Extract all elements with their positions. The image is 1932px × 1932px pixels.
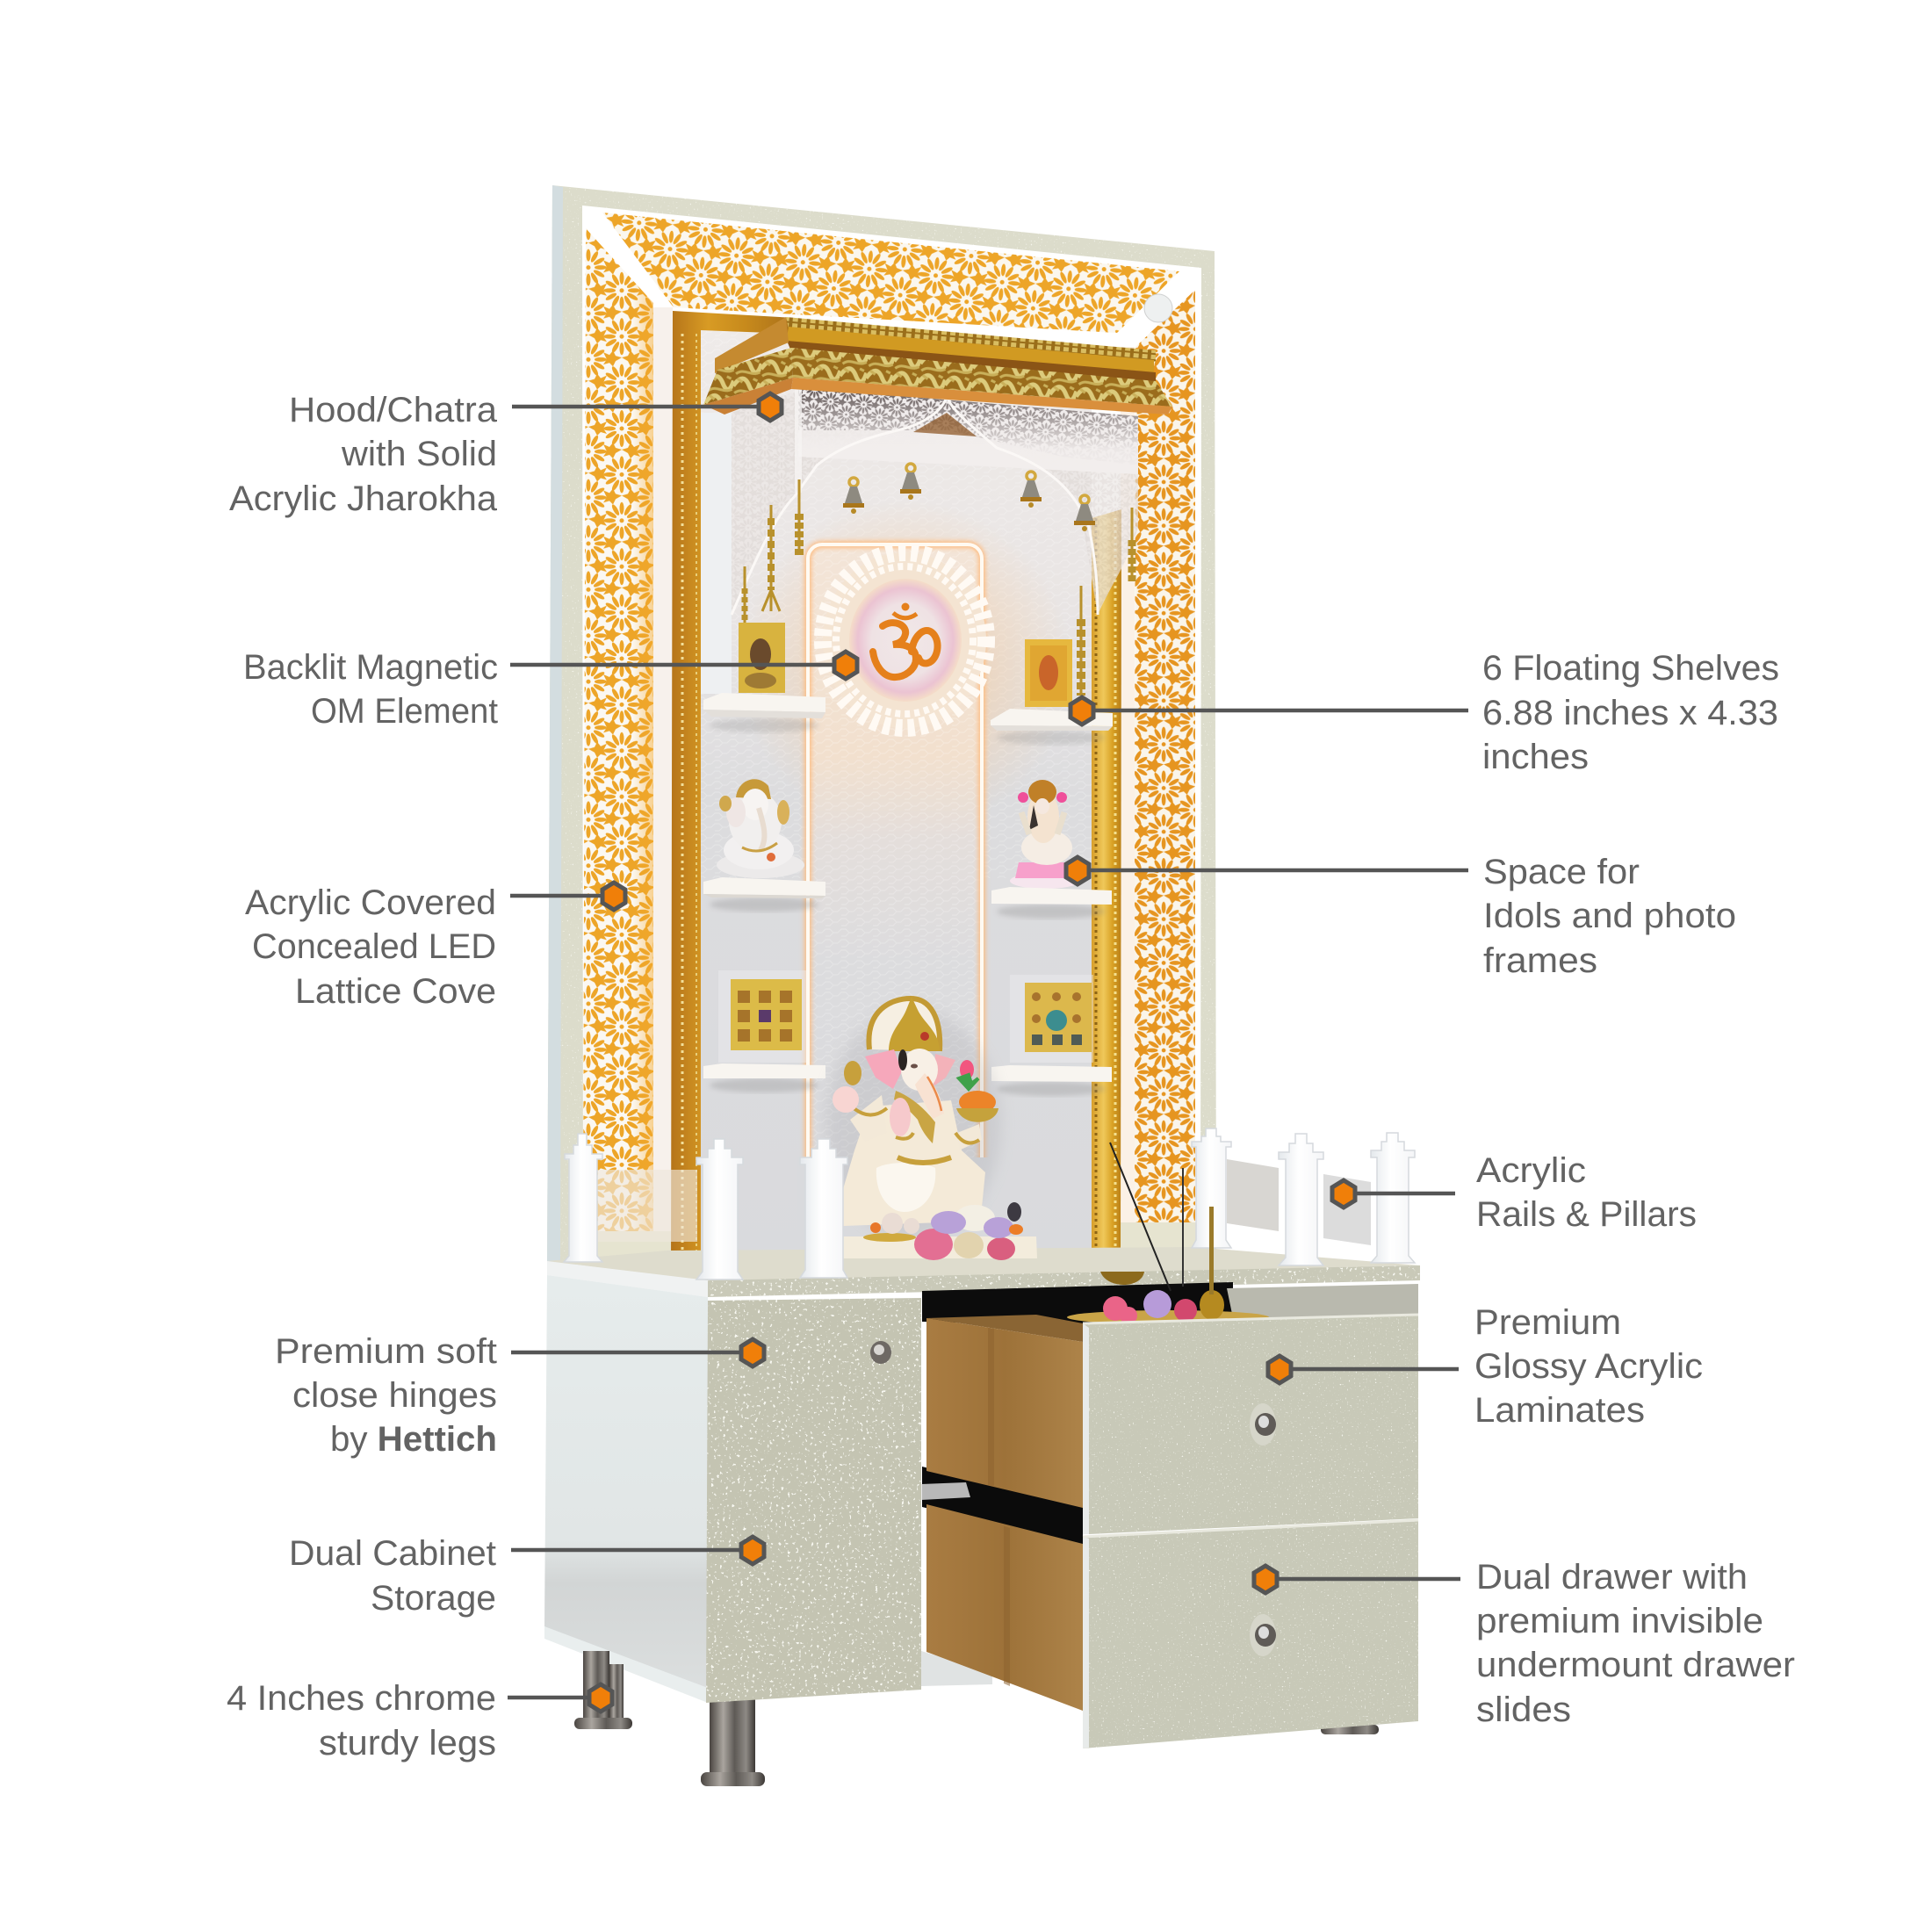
icon: lower drawer knob — [1250, 1614, 1276, 1656]
callout: floating shelves: 6 Floating Shelves — [1482, 649, 1779, 688]
small ganesha idol — [717, 779, 804, 878]
callout: cabinet storage: Storage — [371, 1579, 496, 1618]
lakshmi idol — [1010, 780, 1080, 889]
icon: OM backlit mandala — [823, 552, 986, 728]
callout: laminates: Glossy Acrylic — [1474, 1347, 1703, 1386]
flowers at idol base — [914, 1202, 1023, 1260]
callout: rails and pillars — [1332, 1151, 1697, 1234]
callout: laminates: Laminates — [1474, 1391, 1645, 1430]
callout: floating shelves — [1071, 649, 1779, 776]
panel: upper drawer front — [1083, 1315, 1418, 1534]
callout: dual drawer: slides — [1476, 1690, 1571, 1729]
floating shelves — [703, 693, 1113, 1096]
callout: hinges — [275, 1332, 764, 1459]
panel: gold moulding frame — [671, 311, 1121, 1276]
panel: interior black gaps — [921, 1282, 1233, 1686]
callout: cabinet storage: Dual Cabinet — [289, 1534, 496, 1573]
callout: floating shelves: 6.88 inches x 4.33 — [1482, 694, 1778, 732]
pooja items — [1067, 1143, 1269, 1324]
callout: rails and pillars: Acrylic — [1476, 1151, 1586, 1190]
callout: laminates — [1268, 1303, 1703, 1430]
icon: brand seal — [1144, 294, 1172, 322]
callout: dual drawer: Dual drawer with — [1476, 1558, 1748, 1597]
callout: laminates: Premium — [1474, 1303, 1621, 1342]
callout: floating shelves: inches — [1482, 738, 1589, 776]
icon: hanging bells — [843, 464, 1095, 531]
translucent rail right — [1227, 1159, 1371, 1245]
back right top panel — [1227, 1284, 1418, 1318]
icon: gold card right — [1025, 639, 1072, 707]
callout: LED cove: Acrylic Covered — [245, 883, 496, 922]
icon: yantra right — [1010, 975, 1093, 1063]
panel: lower drawer wood side — [926, 1504, 1083, 1711]
legs — [574, 1651, 1379, 1786]
callout: cabinet storage — [289, 1534, 764, 1618]
icon: door knob — [870, 1341, 891, 1364]
panel: lattice left band — [583, 228, 673, 1238]
panel: outer back frame — [547, 185, 1216, 1265]
panel: lower cream strips — [583, 1222, 1200, 1260]
callout: legs: 4 Inches chrome — [227, 1679, 496, 1718]
panel: countertop — [547, 1247, 1420, 1297]
acrylic pillars — [564, 1128, 1415, 1280]
callout: dual drawer: undermount drawer — [1476, 1646, 1795, 1684]
callout: rails and pillars: Rails & Pillars — [1476, 1195, 1697, 1234]
panel: cabinet white side — [544, 1275, 708, 1703]
callout: idols space: frames — [1483, 941, 1597, 980]
callout: idols space: Space for — [1483, 853, 1640, 891]
callout: OM element: OM Element — [311, 692, 498, 731]
panel: back wall — [701, 325, 1092, 1275]
callout: hood: with Solid — [341, 435, 497, 473]
translucent rail left — [588, 1170, 697, 1242]
callout: legs: sturdy legs — [319, 1724, 496, 1763]
panel: lower drawer front — [1083, 1520, 1418, 1748]
callout: idols space — [1066, 853, 1736, 980]
panel: hood / chatra — [703, 317, 1172, 415]
callout: hinges: close hinges — [292, 1376, 497, 1415]
panel: LED frame element — [739, 501, 1072, 1272]
callout: OM element — [243, 648, 857, 731]
callout: OM element: Backlit Magnetic — [243, 648, 498, 687]
callout: legs — [227, 1679, 612, 1763]
callout: dual drawer: premium invisible — [1476, 1602, 1763, 1640]
large ganesha idol — [825, 997, 1037, 1258]
callout: hood — [229, 391, 782, 518]
callout: LED cove: Concealed LED — [252, 927, 496, 966]
panel: upper drawer wood side — [926, 1315, 1083, 1508]
panel: acrylic jharokha — [732, 387, 1138, 615]
callout: LED cove — [245, 883, 625, 1011]
callout: dual drawer — [1254, 1558, 1795, 1729]
callout: hood: Acrylic Jharokha — [229, 479, 498, 518]
icon: upper drawer knob — [1250, 1403, 1276, 1445]
callout: hood: Hood/Chatra — [289, 391, 498, 429]
panel: lattice right band — [1121, 290, 1195, 1225]
icon: yantra left — [718, 970, 806, 1063]
panel: cabinet door — [706, 1298, 921, 1703]
callout: idols space: Idols and photo — [1483, 897, 1736, 935]
mandir cabinet photo illustration — [544, 185, 1420, 1786]
icon: gold card left — [739, 623, 785, 693]
panel: lattice top band — [602, 213, 1179, 333]
callout: LED cove: Lattice Cove — [295, 972, 496, 1011]
callout: hinges: Premium soft — [275, 1332, 497, 1371]
callout: hinges: by Hettich — [330, 1420, 497, 1459]
icon: hanging ornaments — [745, 479, 1132, 696]
